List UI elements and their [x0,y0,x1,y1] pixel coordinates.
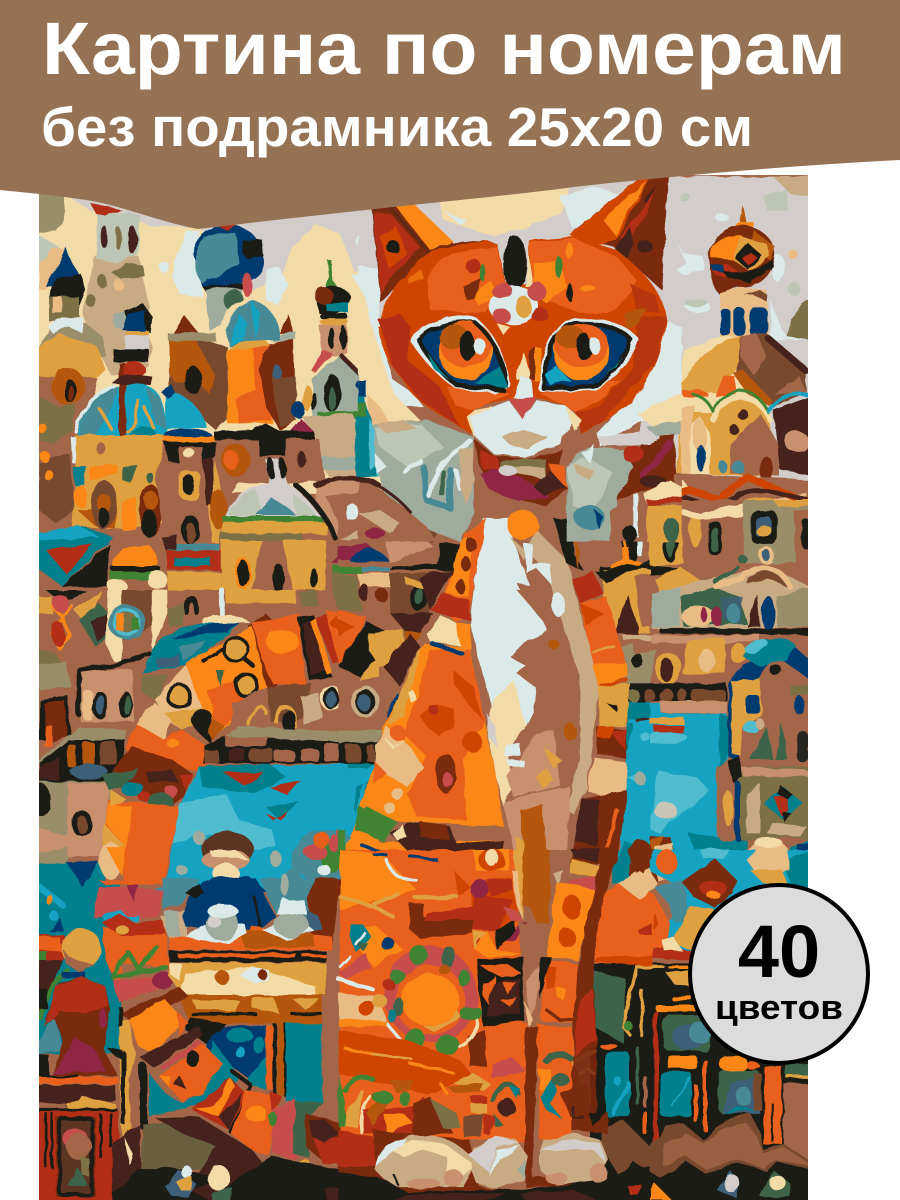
mid-left city, tail and boats [31,590,382,893]
lower-right table panels [590,849,813,1200]
cat head and upper sky [358,175,682,542]
cat torso and body [338,510,653,867]
mid-right city and water [600,500,813,880]
header banner [0,0,900,229]
upper-right church with onion dome [640,177,810,523]
title: Картина по номерам [42,7,846,90]
upper-left churches [36,173,382,594]
cat lower body with flower and paws [338,848,655,1200]
lower-left market and tail [37,874,379,1200]
badge: 40 colours: цветов [715,989,843,1027]
subtitle: без подрамника 25х20 см [41,96,753,158]
badge: 40 colours [690,885,868,1063]
painting: cat and city [31,173,813,1200]
badge: 40 colours: 40 [738,910,820,993]
